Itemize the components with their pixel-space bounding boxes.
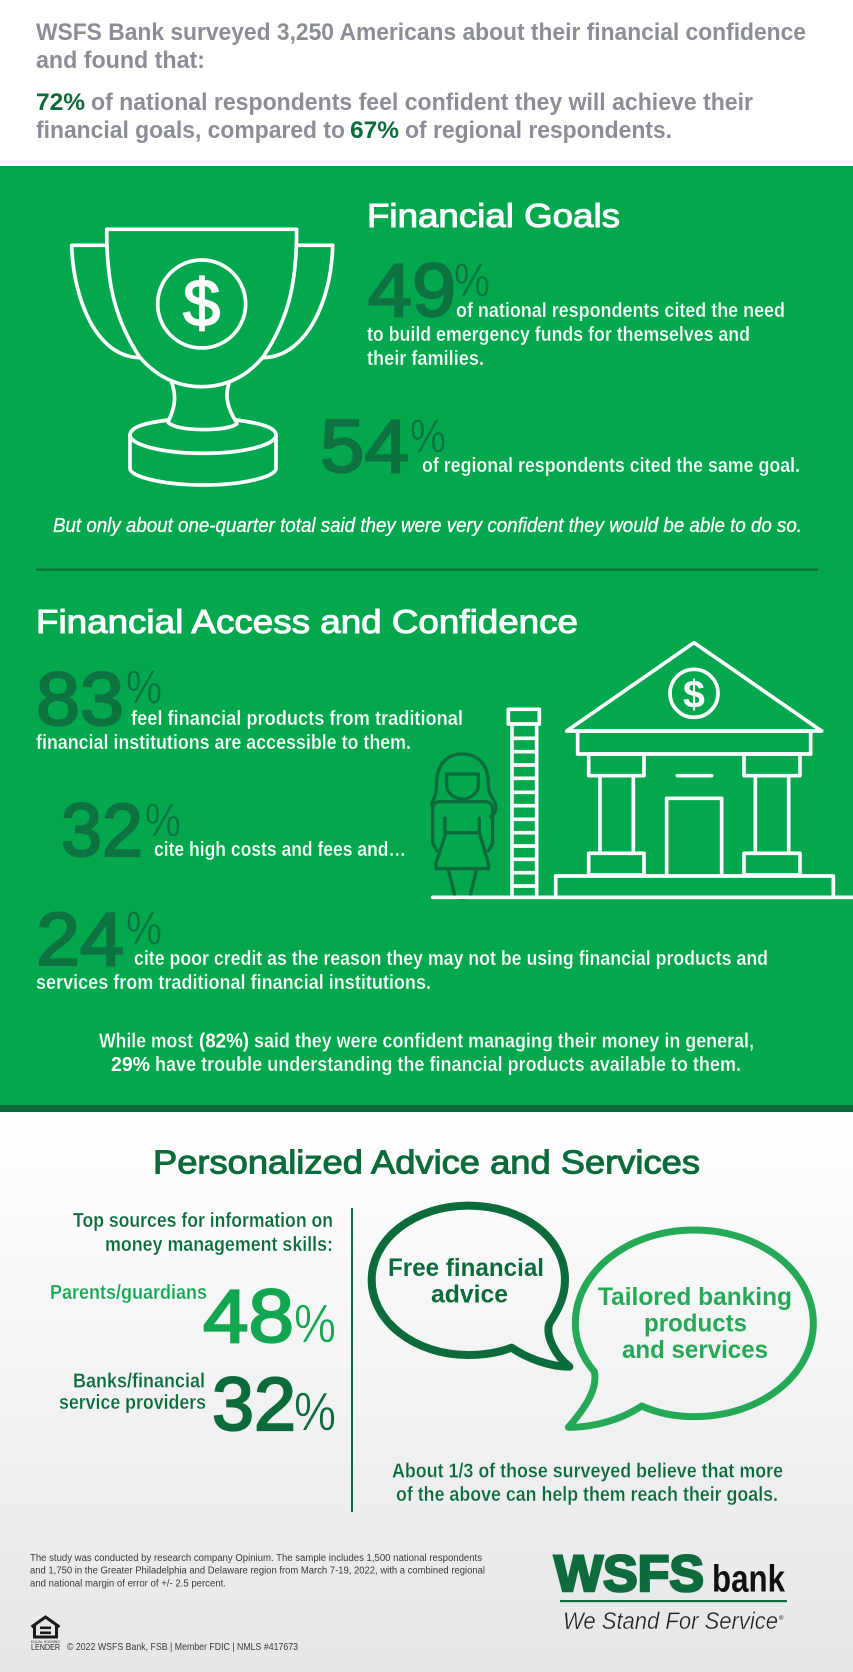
stat: 49% national: 49 (368, 248, 456, 332)
logo: WSFS bank: ® (779, 1615, 784, 1622)
footnote: methodology: and national margin of error of +/- 2.5 percent. (30, 1578, 226, 1590)
panel: intro (0, 0, 853, 166)
footnote: methodology: and 1,750 in the Greater Philadelphia and Delaware region from March 7-19, 2022, with a combined regional (30, 1566, 485, 1576)
icon: ladder (508, 709, 539, 897)
callout: 82% confident, 29% have trouble (99, 1030, 754, 1076)
text: copyright: © 2022 WSFS Bank, FSB | Member FDIC | NMLS #417673 (67, 1642, 298, 1653)
intro text: survey summary: and found that: (36, 47, 205, 74)
text: about 1/3 believe: About 1/3 of those surveyed believe that more (392, 1460, 783, 1482)
logo: WSFS bank (554, 1545, 787, 1635)
dark green band (0, 1105, 853, 1112)
icon: bank building: $ (683, 672, 705, 716)
text: about 1/3 believe (392, 1460, 783, 1506)
stat: banks 32%: % (294, 1382, 336, 1442)
stat: 32% (61, 788, 406, 872)
stat: parents/guardians 48%: Parents/guardians (50, 1282, 207, 1304)
icon: trophy (72, 229, 333, 485)
speech bubble: free financial advice: advice (431, 1281, 508, 1309)
speech bubble: tailored banking products and services: and services (622, 1336, 768, 1364)
callout: 82% confident, 29% have trouble: said they were confident managing their money in general, (254, 1030, 754, 1052)
stat: 49% national: their families. (367, 348, 484, 370)
stat: banks 32% (59, 1362, 336, 1446)
stat: 24%: % (126, 901, 162, 954)
intro text: 72% vs 67%: financial goals, compared to (36, 117, 345, 144)
panel: green section (0, 166, 853, 1106)
text: top sources: Top sources for information on (73, 1210, 333, 1232)
stat: 32%: 32 (61, 788, 143, 872)
text: about 1/3 believe: of the above can help them reach their goals. (396, 1484, 778, 1506)
intro text: 72% vs 67%: of national respondents feel confident they will achieve their (91, 89, 753, 116)
stat: 83%: financial institutions are accessible to them. (36, 732, 411, 754)
logo: WSFS bank: bank (712, 1559, 786, 1601)
stat: banks 32%: 32 (212, 1362, 296, 1446)
speech bubble: free financial advice: Free financial (388, 1254, 544, 1282)
stat: 24% (36, 897, 768, 994)
stat: 54% regional: % (410, 409, 446, 462)
text: top sources (73, 1210, 333, 1256)
stat: 24%: 24 (36, 897, 124, 981)
callout: 82% confident, 29% have trouble: While most (99, 1030, 193, 1052)
stat: banks 32%: service providers (59, 1392, 206, 1414)
stat: 49% national: to build emergency funds for themselves and (367, 324, 750, 346)
icon: equal housing lender: LENDER (31, 1643, 60, 1652)
stat: 54% regional (320, 404, 800, 488)
stat: 49% national: % (454, 253, 490, 306)
intro text: 72% vs 67%: of regional respondents. (405, 117, 672, 144)
stat: 83%: 83 (36, 657, 124, 741)
stat: 54% regional: of regional respondents cited the same goal. (422, 455, 800, 477)
heading: Financial Goals: Financial Goals (367, 197, 620, 234)
callout: 82% confident, 29% have trouble: (82%) (199, 1030, 249, 1052)
footnote: methodology (30, 1553, 485, 1590)
intro text: 72% vs 67%: 67% (350, 117, 399, 144)
intro text: 72% vs 67% (36, 89, 753, 144)
footnote: methodology: The study was conducted by research company Opinium. The sample includes 1,500 national respondents (30, 1553, 482, 1564)
stat: 24%: cite poor credit as the reason they may not be using financial products and (134, 948, 768, 970)
heading: Financial Access and Confidence: Financial Access and Confidence (36, 603, 578, 640)
intro text: 72% vs 67%: 72% (36, 89, 85, 116)
speech bubble: tailored banking products and services: Tailored banking (598, 1283, 792, 1311)
speech bubble: tailored banking products and services: products (644, 1310, 747, 1338)
panel: personalized advice and services (0, 1112, 853, 1672)
stat: parents/guardians 48%: % (294, 1294, 336, 1354)
stat: 24%: services from traditional financial institutions. (36, 972, 431, 994)
speech bubble: tailored banking products and services (568, 1230, 813, 1427)
stat: parents/guardians 48%: 48 (203, 1274, 294, 1358)
stat: 32%: % (145, 793, 181, 846)
stat: 54% regional: 54 (320, 404, 409, 488)
stat: parents/guardians 48% (50, 1274, 336, 1358)
stat: 49% national: of national respondents cited the need (456, 300, 785, 322)
callout: 82% confident, 29% have trouble: have trouble understanding the financial products available to them. (155, 1054, 741, 1076)
callout: 82% confident, 29% have trouble: 29% (111, 1054, 150, 1076)
icon: woman (431, 754, 496, 898)
intro text: survey summary: WSFS Bank surveyed 3,250 Americans about their financial confidence (36, 19, 806, 46)
text: top sources: money management skills: (105, 1234, 333, 1256)
stat: 83% (36, 657, 463, 754)
icon: bank building (433, 643, 853, 897)
icon: equal housing lender: EQUAL HOUSING (31, 1640, 60, 1644)
icon: woman, ladder and bank (431, 643, 853, 898)
speech bubble: free financial advice (372, 1206, 569, 1367)
logo: WSFS bank: We Stand For Service (563, 1608, 778, 1635)
stat: banks 32%: Banks/financial (73, 1371, 205, 1393)
icon: trophy: $ (183, 267, 220, 341)
callout: one-quarter very confident: But only about one-quarter total said they were very confident they would be able to do so. (53, 515, 802, 537)
heading: Personalized Advice and Services: Personalized Advice and Services (153, 1144, 700, 1180)
intro text: survey summary (36, 19, 806, 74)
logo: WSFS bank: WSFS (554, 1545, 704, 1602)
stat: 32%: cite high costs and fees and… (154, 839, 406, 861)
stat: 83%: % (126, 660, 162, 713)
icon: equal housing lender (31, 1617, 60, 1652)
stat: 49% national (367, 248, 785, 370)
stat: 83%: feel financial products from traditional (131, 708, 463, 730)
